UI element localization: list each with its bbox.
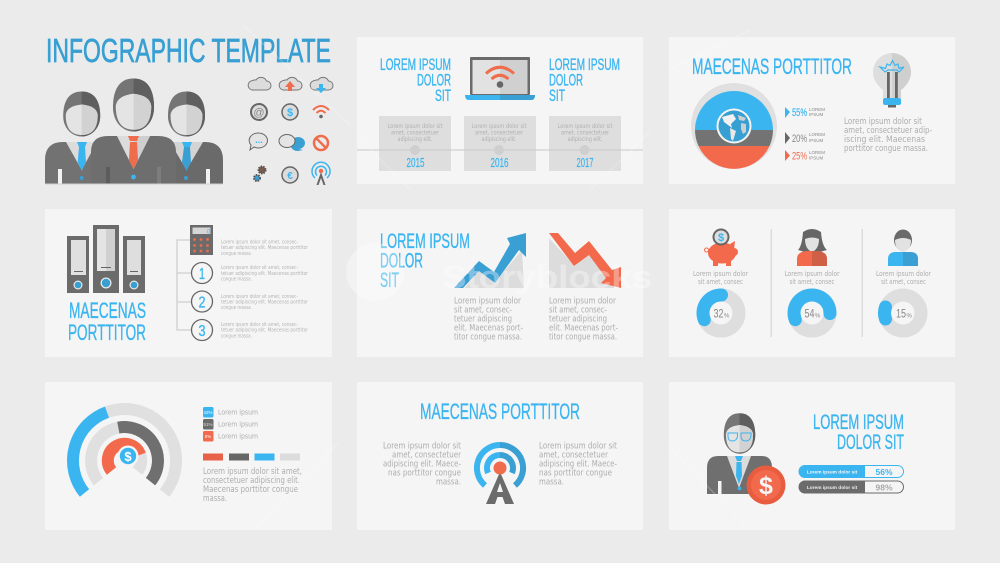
text block right [549, 296, 618, 342]
text block left: Lorem ipsum dolor sit [383, 440, 462, 450]
legend: 55 percent: IPSUM [809, 112, 824, 117]
heading: right [549, 55, 620, 105]
caption [876, 269, 932, 286]
heading: right: SIT [549, 86, 565, 105]
progress bar 56 percent: Lorem ipsum dolor sit [807, 470, 858, 476]
legend: 42% [203, 410, 213, 415]
text block left: amet, consectetuer [392, 450, 461, 460]
card 2016: Lorem ipsum dolor sit [472, 123, 527, 130]
text block left [383, 440, 462, 486]
text block right: massa. [539, 476, 564, 486]
step descriptions: tetuer adipiscing elit. Maecenas porttitor [221, 271, 309, 277]
heading: left [380, 55, 451, 105]
text block [203, 466, 302, 503]
caption: sit amet, consec [698, 277, 743, 286]
text block right: elit. Maecenas port- [549, 322, 618, 332]
legend: 20 percent [785, 132, 825, 145]
text block [844, 116, 932, 153]
icon: cloud download [310, 77, 333, 93]
heading: MAECENAS PORTTITOR [420, 399, 580, 424]
step 1 [192, 262, 212, 284]
step 2: 2 [198, 294, 206, 312]
legend: 25 percent [785, 150, 825, 162]
heading: PORTTITOR [68, 320, 146, 345]
step descriptions: congue massa. [221, 251, 252, 257]
icon: small antenna [312, 162, 330, 185]
text block left: Lorem ipsum dolor [454, 296, 521, 306]
caption [784, 269, 840, 286]
text block left [454, 296, 523, 342]
donut: 54 percent: % [815, 314, 821, 320]
panel: businessman progress [669, 382, 955, 530]
text block: massa. [203, 493, 227, 503]
panel: donut stats [669, 209, 955, 357]
card 2016: 2016 [490, 155, 508, 170]
heading: DOLOR [380, 250, 423, 272]
icon: wifi [313, 106, 329, 118]
step descriptions: Lorem ipsum dolor sit amet, consec- [221, 294, 298, 300]
connector tree [177, 240, 191, 330]
text block left: titor congue massa. [454, 332, 522, 342]
text block right: Lorem ipsum dolor [549, 296, 616, 306]
chart: concentric gauge [73, 409, 176, 493]
heading: left: DOLOR [417, 70, 451, 90]
chart: globe pie [691, 83, 777, 169]
panel: globe breakdown [669, 37, 955, 184]
icon: businessman with dollar coin [707, 413, 786, 504]
caption [693, 269, 749, 286]
text block: Lorem ipsum dolor sit [844, 116, 923, 126]
step descriptions: tetuer adipiscing elit. Maecenas porttitor [221, 328, 309, 334]
card 2016 [472, 123, 527, 170]
legend: 51% [203, 422, 213, 427]
panel: timeline [357, 37, 643, 184]
icon: chat bubble: ... [255, 135, 263, 145]
icon: no entry [314, 136, 328, 150]
watermark [243, 25, 750, 530]
caption: sit amet, consec [881, 277, 926, 286]
icon grid [248, 77, 333, 185]
legend: Lorem ipsum [218, 420, 258, 428]
step 1: 1 [199, 266, 205, 283]
progress bar 98 percent: Lorem ipsum dolor sit [807, 485, 858, 491]
panel: antenna [357, 382, 643, 530]
icon: binders [67, 225, 145, 293]
text block: iscing elit. Maecenas [844, 134, 925, 144]
donut: 54 percent: 54 [804, 308, 815, 320]
card 2015: 2015 [406, 155, 424, 170]
legend: 55 percent: LOREM [809, 107, 825, 112]
icon: euro coin: € [287, 171, 293, 182]
icon: three business people [45, 78, 223, 184]
text block: amet, consectetuer adip- [844, 125, 932, 135]
chart: rising arrow [454, 233, 526, 288]
donut: 15 percent: 15 [896, 308, 906, 320]
heading: right: LOREM IPSUM [549, 55, 620, 74]
text block: consectetuer adipiscing elit. [203, 475, 300, 485]
step descriptions: Lorem ipsum dolor sit amet, consec- [221, 265, 298, 271]
text block left: tetuer adipiscing [454, 314, 512, 324]
heading: MAECENAS [69, 298, 146, 323]
text block right: nas porttitor congue [539, 468, 612, 478]
progress bar 56 percent: 56% [875, 467, 893, 477]
step descriptions: congue massa. [221, 334, 252, 340]
heading: DOLOR SIT [837, 431, 904, 454]
icon: man [888, 230, 918, 266]
donut: 32 percent: 32 [714, 308, 724, 320]
icon: woman [797, 229, 827, 266]
legend: 20 percent: 20% [792, 133, 807, 145]
step descriptions: tetuer adipiscing elit. Maecenas porttitor [221, 245, 309, 251]
step descriptions: Lorem ipsum dolor sit amet, consec- [221, 322, 298, 328]
icon: light bulb [873, 53, 911, 108]
heading: SIT [380, 269, 399, 292]
icon: two chat bubbles [279, 134, 305, 151]
legend: 55 percent [785, 107, 825, 119]
text block right [539, 440, 618, 486]
chart: falling arrow [549, 233, 621, 288]
heading: LOREM IPSUM [813, 411, 904, 434]
panel: trend charts [357, 209, 643, 357]
legend: 25 percent: 25% [792, 150, 807, 162]
text block left: massa. [436, 476, 461, 486]
text block right: Lorem ipsum dolor sit [539, 440, 618, 450]
text block right: tetuer adipiscing [549, 314, 607, 324]
card 2017: amet, consectetuer [561, 130, 609, 137]
icon: piggy bank [704, 228, 738, 266]
card 2016: amet, consectetuer [475, 130, 523, 137]
legend: Lorem ipsum [218, 432, 258, 440]
icon: broadcast antenna [477, 445, 523, 504]
card 2015: Lorem ipsum dolor sit [388, 123, 443, 130]
text block: porttitor congue massa. [844, 143, 928, 153]
icon: cloud [248, 77, 271, 90]
panel: binders [45, 209, 332, 357]
icon: dollar coin: $ [287, 107, 293, 119]
timeline cards [357, 116, 643, 171]
text block: Lorem ipsum dolor sit amet, [203, 466, 302, 476]
card 2015 [388, 123, 443, 170]
legend: 20 percent: LOREM [809, 132, 825, 137]
chart: concentric gauge: $ [124, 449, 132, 464]
legend: 20 percent: IPSUM [809, 138, 824, 143]
icon: piggy bank: $ [718, 232, 724, 244]
card 2015: amet, consectetuer [391, 130, 439, 137]
donut: 54 percent [794, 295, 830, 331]
heading [813, 411, 904, 454]
legend: Lorem ipsum [218, 408, 258, 416]
watermark: Storyblocks [442, 259, 652, 295]
icon: gears [254, 166, 266, 181]
caption: sit amet, consec [790, 277, 834, 286]
progress bar 98 percent [799, 480, 904, 494]
donut: 15 percent: % [906, 314, 912, 320]
card 2017 [558, 123, 613, 170]
legend [203, 407, 258, 442]
text block right: adipiscing elit. Maece- [539, 458, 617, 468]
text block right: amet, consectetuer [539, 450, 608, 460]
heading: right: DOLOR [549, 70, 583, 90]
legend: 55 percent: 55% [792, 107, 807, 119]
card 2017: Lorem ipsum dolor sit [558, 123, 613, 130]
text block right: titor congue massa. [549, 332, 617, 342]
title: INFOGRAPHIC TEMPLATE [46, 33, 331, 70]
card 2017: 2017 [576, 155, 594, 170]
donut: 15 percent [884, 295, 921, 331]
progress bar 56 percent [799, 465, 904, 478]
step descriptions: congue massa. [221, 276, 252, 282]
step 3 [192, 320, 212, 340]
donut: 32 percent [703, 295, 739, 331]
caption: Lorem ipsum dolor [693, 269, 749, 278]
heading: left: SIT [435, 86, 451, 105]
text block: Maecenas porttitor congue [203, 484, 298, 494]
icon: at sign: @ [253, 107, 265, 119]
progress bar 98 percent: 98% [875, 482, 893, 492]
step descriptions: Lorem ipsum dolor sit amet, consec- [221, 240, 298, 246]
donut: 32 percent: % [724, 314, 730, 320]
icon: calculator [190, 225, 213, 255]
text block left: sit amet, consec- [454, 304, 512, 314]
heading: LOREM IPSUM [380, 230, 470, 253]
heading: left: LOREM IPSUM [380, 55, 451, 74]
legend: 8% [205, 434, 211, 439]
legend: 25 percent: LOREM [809, 150, 825, 155]
colour swatches [203, 454, 300, 460]
step descriptions [221, 240, 309, 340]
icon: cloud upload [279, 77, 302, 91]
panel: gauge [45, 382, 332, 530]
heading: MAECENAS PORTTITOR [692, 54, 852, 79]
step 2 [192, 291, 212, 312]
heading [68, 298, 146, 345]
caption: Lorem ipsum dolor [876, 269, 932, 278]
text block left: adipiscing elit. Maece- [383, 458, 461, 468]
text block right: sit amet, consec- [549, 304, 607, 314]
legend: 25 percent: IPSUM [809, 156, 824, 160]
text block left: elit. Maecenas port- [454, 322, 523, 332]
icon: businessman with dollar coin: $ [759, 472, 773, 500]
card 2015: adipiscing elit. [398, 136, 433, 143]
step descriptions: congue massa. [221, 305, 252, 311]
caption: Lorem ipsum dolor [784, 269, 840, 278]
step 3: 3 [198, 323, 206, 340]
card 2016: adipiscing elit. [482, 136, 517, 143]
icon: laptop with wifi [465, 57, 535, 100]
step descriptions: tetuer adipiscing elit. Maecenas porttitor [221, 300, 309, 306]
card 2017: adipiscing elit. [568, 136, 603, 143]
text block left: nas porttitor congue [388, 468, 461, 478]
heading [380, 230, 470, 292]
icon: calculator: 0 [207, 230, 211, 236]
